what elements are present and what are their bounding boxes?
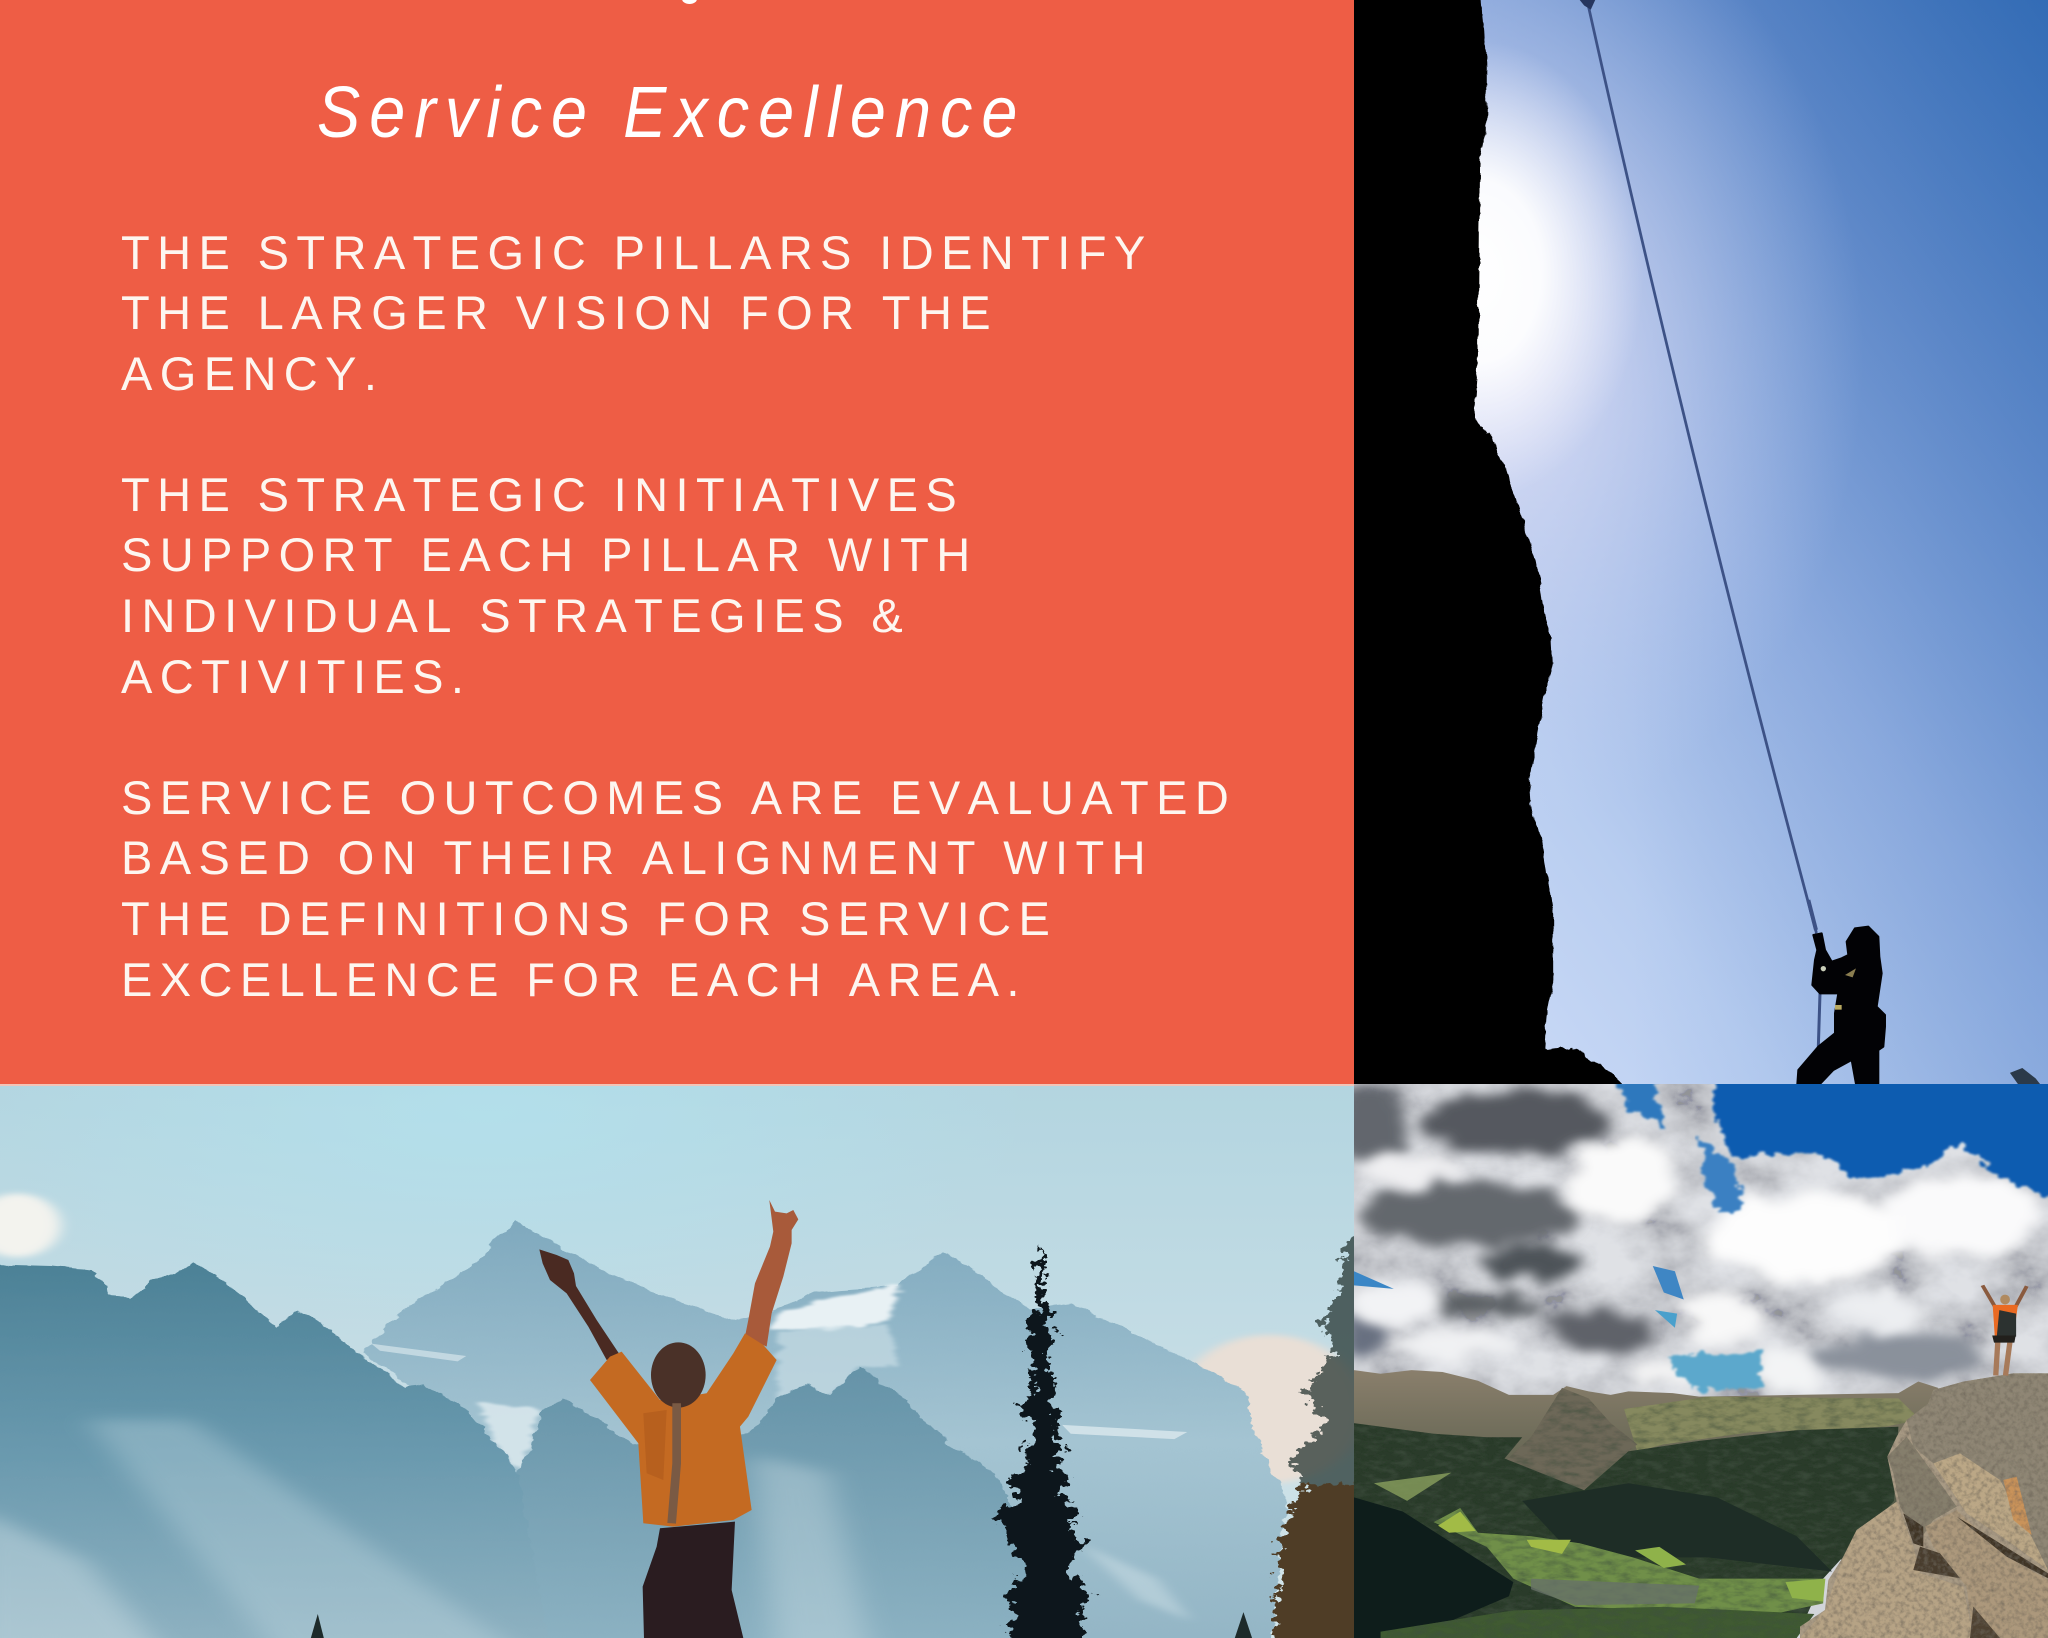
rope anchor bbox=[1580, 0, 1595, 10]
shirt bbox=[590, 1333, 777, 1527]
text block: strategic initiatives bbox=[121, 468, 978, 703]
lit valley bbox=[1434, 1508, 1823, 1614]
center tree bbox=[997, 1243, 1092, 1638]
text block: service outcomes: SERVICE OUTCOMES ARE EVALUATED bbox=[121, 771, 1236, 824]
text block: service outcomes: THE DEFINITIONS FOR SERVICE bbox=[121, 892, 1057, 945]
text block: strategic pillars: THE STRATEGIC PILLARS IDENTIFY bbox=[121, 226, 1153, 279]
photo: climber silhouette on rope against blue sky bbox=[1354, 0, 2048, 1084]
rock face bbox=[1336, 0, 1637, 1099]
text block: strategic initiatives: ACTIVITIES. bbox=[121, 650, 471, 703]
climber bbox=[1797, 900, 1885, 1084]
peak bbox=[1500, 1388, 1637, 1490]
distant foliage bbox=[2010, 1068, 2040, 1084]
photo: woman with raised arms before mountains bbox=[0, 1084, 1354, 1638]
panel: orange text panel bbox=[0, 0, 1354, 1084]
pants bbox=[643, 1522, 743, 1638]
sky bbox=[0, 1084, 1354, 1638]
hiker bbox=[1982, 1285, 2027, 1375]
green plateau bbox=[1624, 1397, 1921, 1451]
text block: strategic pillars bbox=[121, 226, 1153, 400]
bright cloud masses bbox=[1350, 1141, 2040, 1391]
front peaks bbox=[518, 1367, 1088, 1638]
text block: service outcomes: BASED ON THEIR ALIGNMENT WITH bbox=[121, 831, 1153, 884]
text block: strategic initiatives: SUPPORT EACH PILLAR WITH bbox=[121, 528, 978, 581]
glacier snow bbox=[773, 1285, 898, 1331]
right trees bbox=[1291, 1236, 1382, 1490]
text block: strategic pillars: AGENCY. bbox=[121, 347, 384, 400]
text block: strategic pillars: THE LARGER VISION FOR THE bbox=[121, 286, 998, 339]
text block: strategic initiatives: INDIVIDUAL STRATEGIES & bbox=[121, 589, 910, 642]
left arm bbox=[539, 1249, 620, 1360]
cloud shadows bbox=[1336, 1088, 1982, 1381]
left range bbox=[0, 1262, 553, 1638]
right arm bbox=[745, 1200, 798, 1347]
dark foreground slope bbox=[1354, 1497, 1513, 1638]
text block: strategic initiatives: THE STRATEGIC INITIATIVES bbox=[121, 468, 964, 521]
title: Service Excellence: Service Excellence bbox=[317, 73, 1026, 153]
clouds base bbox=[1354, 1084, 2048, 1638]
rock outcrop bbox=[1800, 1373, 2048, 1638]
text block: service outcomes bbox=[121, 771, 1236, 1006]
text block: service outcomes: EXCELLENCE FOR EACH AREA. bbox=[121, 953, 1027, 1006]
sky bbox=[1354, 0, 2048, 1084]
clouds bbox=[1174, 1335, 1364, 1483]
rope bbox=[1589, 7, 1817, 933]
woman bbox=[539, 1200, 798, 1638]
hair bbox=[651, 1342, 706, 1408]
photo: hiker on rock above valley under clouds bbox=[1354, 1084, 2048, 1638]
light rays bbox=[86, 1420, 535, 1638]
dark forest bbox=[1354, 1423, 1898, 1638]
clipped heading descender bbox=[682, 0, 697, 4]
blue sky area bbox=[1708, 1070, 2048, 1201]
distant mountains bbox=[1354, 1370, 1938, 1561]
far mountains bbox=[363, 1220, 1287, 1638]
